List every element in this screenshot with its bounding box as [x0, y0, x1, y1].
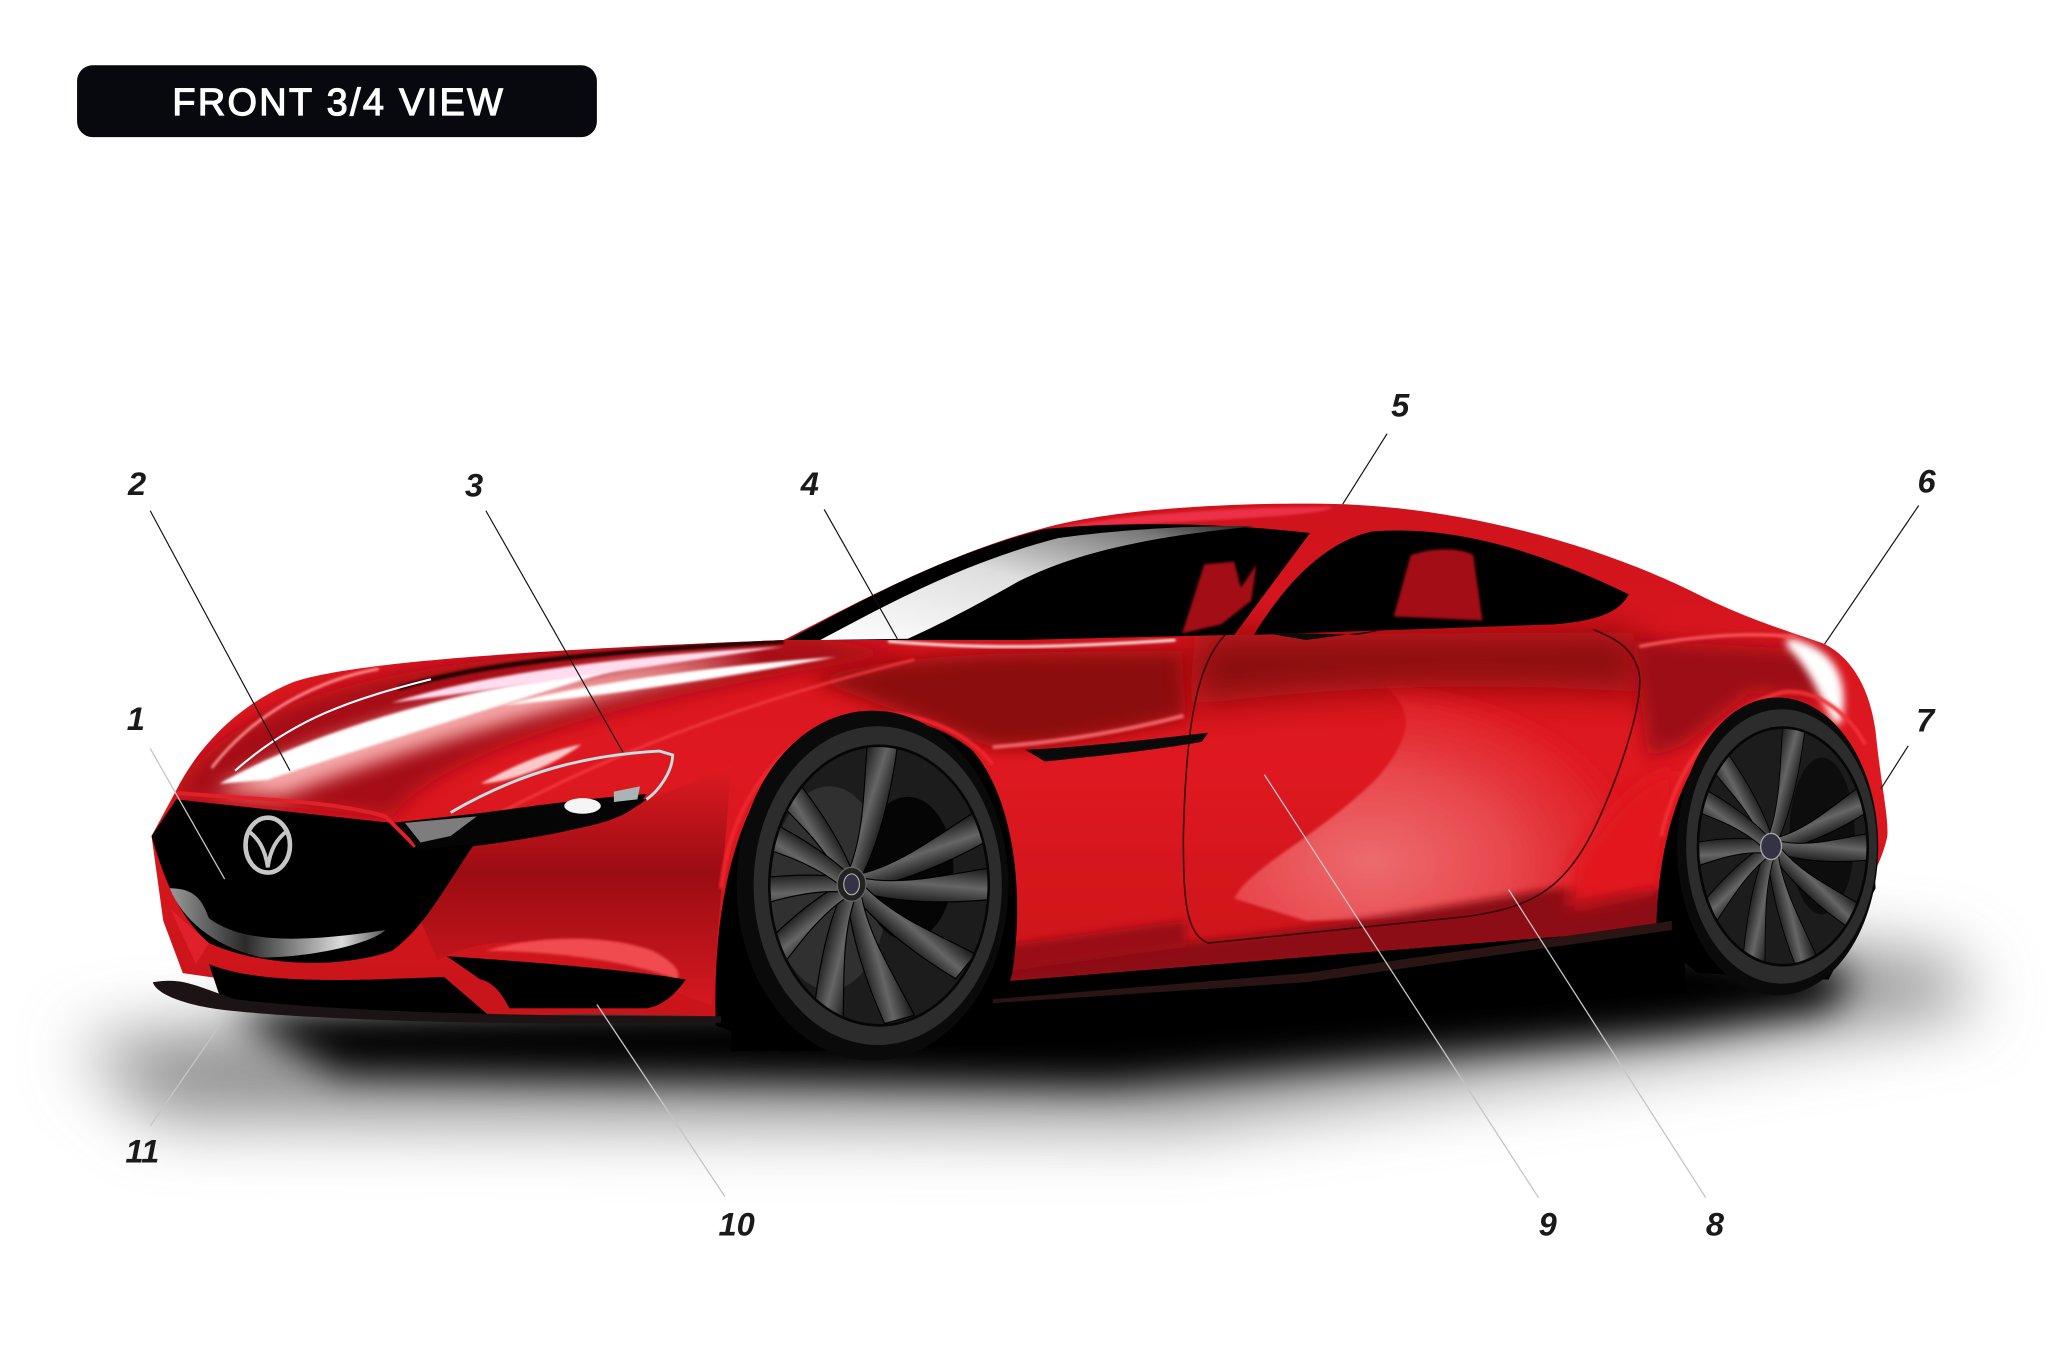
rocker dark band [993, 888, 1678, 986]
rim and brake [770, 747, 988, 1024]
callout 2 [127, 465, 290, 771]
tyre [1677, 698, 1878, 995]
callout 8: 8 [1706, 1206, 1725, 1243]
rear lower bright [1558, 809, 1660, 916]
grille chrome lower [170, 888, 385, 957]
rear wheel arch [1656, 703, 1876, 980]
hub badge [1761, 833, 1782, 859]
front lower black [209, 964, 490, 1016]
windscreen reflection [820, 526, 1254, 640]
tyre [737, 711, 1008, 1061]
dark light strip [398, 794, 647, 849]
callout 2: 2 [127, 465, 146, 502]
hood shading [170, 637, 914, 816]
rear arch highlight [1661, 692, 1865, 836]
callout 11: 11 [125, 1133, 159, 1170]
bumper light streak [486, 939, 678, 980]
spokes [770, 747, 988, 1024]
car [152, 504, 1887, 1061]
callout 4: 4 [800, 465, 819, 502]
hood main white streak [219, 666, 627, 784]
callout 8 [1509, 890, 1725, 1243]
door pink reflection [1234, 687, 1602, 922]
callout 5: 5 [1391, 387, 1410, 424]
front wheel arch [715, 718, 1017, 1052]
rear side glass [1254, 531, 1629, 635]
title badge: FRONT 3/4 VIEW: FRONT 3/4 VIEW [172, 82, 503, 124]
front seat [1182, 562, 1256, 634]
front splitter [153, 981, 721, 1024]
spokes [1699, 729, 1866, 963]
hood streak upper [392, 647, 784, 703]
callout 4 [800, 465, 897, 639]
bumper corner [170, 908, 209, 964]
fender shoulder shading [810, 650, 1186, 748]
fender lip highlights [501, 658, 916, 810]
rim and brake [1699, 729, 1866, 964]
lower front vent red lip [451, 980, 660, 1016]
car body [152, 504, 1887, 1016]
callout 10 [597, 1004, 755, 1243]
callout 6: 6 [1917, 462, 1936, 499]
white lamps [564, 798, 601, 814]
door shutline [1183, 630, 1640, 943]
strip chrome [405, 816, 477, 843]
callout 9: 9 [1539, 1206, 1558, 1243]
hub badge [837, 867, 866, 901]
door mirror reflection [1260, 630, 1384, 640]
callout 7 [1881, 701, 1936, 789]
callout 5 [1343, 387, 1410, 504]
lower front fascia [418, 764, 731, 1006]
callout 7: 7 [1916, 701, 1936, 738]
hood white streak lower [503, 657, 836, 705]
hood main soft sheen [216, 660, 758, 797]
rear highlight [1787, 637, 1844, 724]
rear quarter shading [1633, 640, 1829, 758]
callout 11 [125, 1012, 229, 1170]
windscreen and front side glass [788, 524, 1310, 640]
front intake [447, 956, 686, 1008]
title badge: FRONT 3/4 VIEW [77, 65, 597, 137]
front wheel [737, 710, 1008, 1050]
headlight [398, 751, 673, 849]
rear seat [1394, 549, 1482, 620]
roof highlight [1058, 507, 1332, 528]
callout 1: 1 [127, 700, 145, 737]
side skirt carbon [993, 921, 1672, 1003]
callout 3 [465, 466, 623, 752]
callout 9 [1264, 775, 1558, 1243]
cheek highlight above headlight [481, 745, 581, 784]
callout 1 [127, 700, 225, 879]
callout 6 [1825, 462, 1936, 644]
front door lower band [1013, 918, 1190, 969]
grille top edge [176, 793, 415, 846]
rear wheel [1668, 698, 1878, 995]
rear shoulder streak [1639, 635, 1796, 647]
Mazda badge [246, 818, 290, 873]
ground shadow [78, 934, 1979, 1123]
front arch highlight [721, 713, 993, 888]
lens outline [451, 751, 673, 812]
door shoulder shading [1189, 632, 1648, 705]
side strake vent [1025, 733, 1208, 762]
grille surround [152, 797, 647, 963]
callout 10: 10 [718, 1206, 755, 1243]
underbody and side skirt [222, 914, 1685, 1052]
callout 3: 3 [465, 466, 483, 503]
